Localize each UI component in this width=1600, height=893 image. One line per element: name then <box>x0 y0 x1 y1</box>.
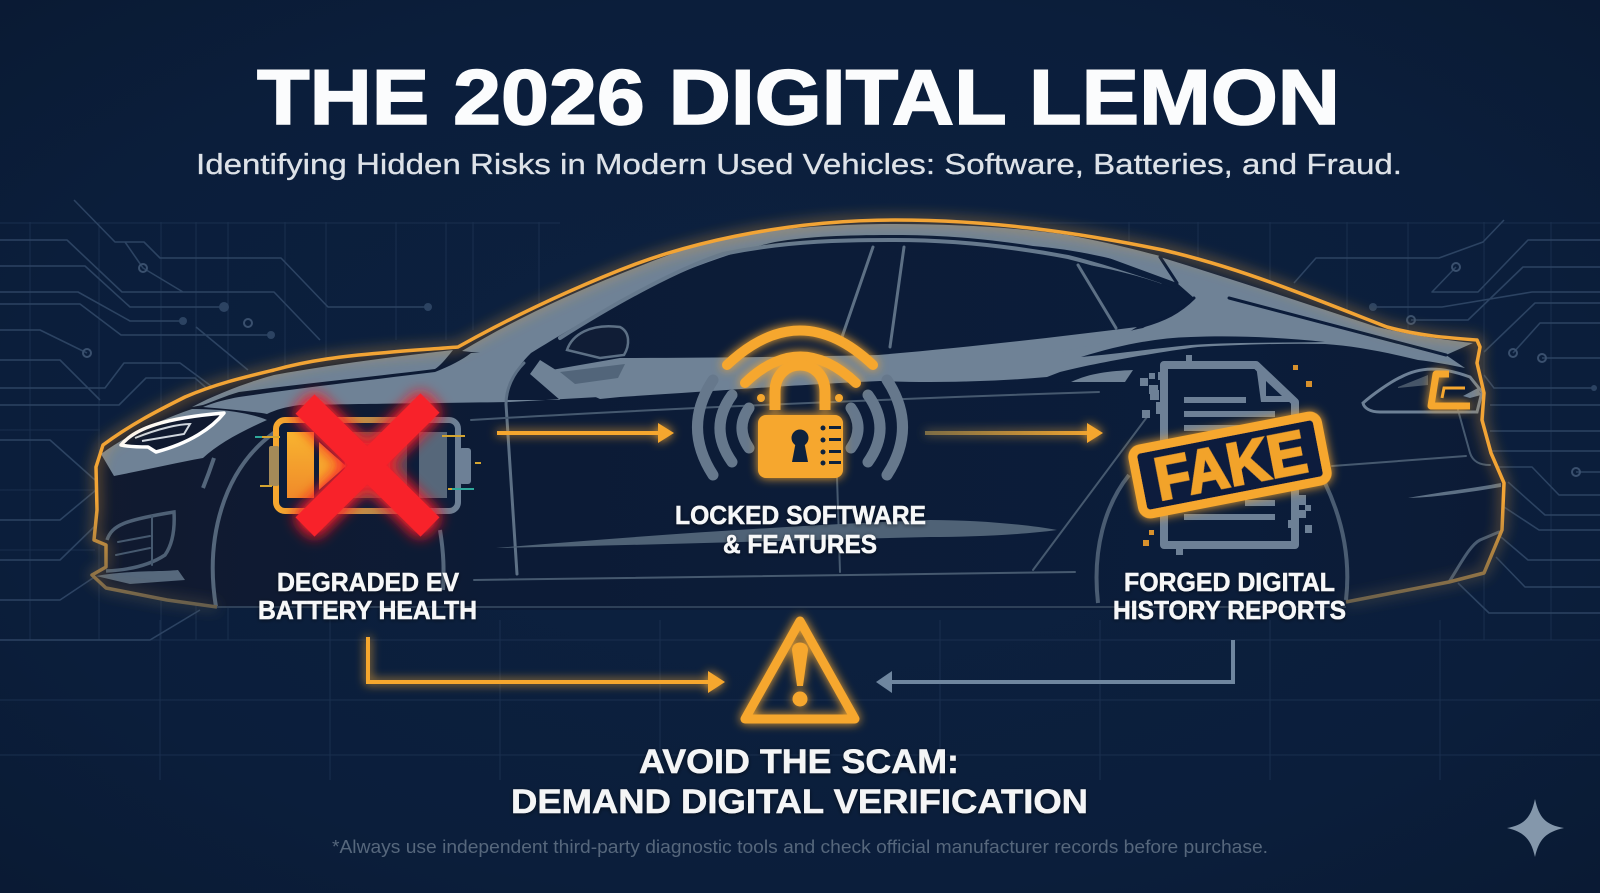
label: degraded battery: BATTERY HEALTH <box>258 595 477 625</box>
headlight <box>121 413 224 452</box>
lower bumper strip <box>96 570 185 584</box>
label: locked software: & FEATURES <box>723 529 877 559</box>
arrow: software to report <box>925 423 1103 443</box>
front wheel arch <box>203 432 444 607</box>
call to action: AVOID THE SCAM: <box>639 743 959 781</box>
side mirror <box>567 326 628 358</box>
rear quarter gray panel <box>1060 240 1473 372</box>
car orange outline <box>92 220 1504 607</box>
label: forged reports: HISTORY REPORTS <box>1113 595 1346 625</box>
battery <box>255 420 481 511</box>
arrow: battery to software <box>497 423 674 443</box>
tail light <box>1363 369 1482 412</box>
title: THE 2026 DIGITAL LEMON <box>257 53 1340 141</box>
rocker lines <box>474 572 1075 580</box>
call to action <box>511 743 1088 821</box>
label: forged reports: FORGED DIGITAL <box>1124 567 1335 597</box>
rear body lines <box>1332 410 1490 466</box>
label: locked software <box>675 500 926 559</box>
mid body crease <box>471 392 1099 420</box>
icon: warning triangle <box>745 621 855 719</box>
footnote: *Always use independent third-party diagnostic tools and check official manufacturer records before purchase. <box>332 837 1268 857</box>
label: forged reports <box>1113 567 1346 625</box>
signal arcs <box>698 380 902 475</box>
hood panel <box>203 353 599 414</box>
rear wheel arch <box>1097 475 1347 603</box>
wifi arcs and padlock <box>727 330 873 478</box>
A-pillar and roof gray band <box>462 224 1160 353</box>
fake stamp: FAKE <box>1149 418 1312 513</box>
door panel lines <box>506 247 1116 574</box>
rear quarter window <box>1077 263 1194 327</box>
arrow: report to warning <box>876 640 1233 693</box>
circuit board background pattern <box>0 200 1600 780</box>
document <box>1140 355 1312 555</box>
arrow: battery to warning <box>368 637 725 693</box>
call to action: DEMAND DIGITAL VERIFICATION <box>511 783 1088 821</box>
icon: locked software <box>698 330 902 478</box>
belt line and shoulder panels <box>540 327 1137 399</box>
label: locked software: LOCKED SOFTWARE <box>675 500 926 530</box>
car body silhouette <box>92 220 1504 610</box>
label: degraded battery: DEGRADED EV <box>277 567 460 597</box>
sill highlight <box>496 520 1057 548</box>
car illustration <box>92 220 1504 610</box>
icon: degraded battery with red cross <box>255 403 481 527</box>
front bumper gray panel <box>101 409 267 476</box>
red X <box>305 403 430 527</box>
fog lamp <box>106 512 174 571</box>
rear panel creases <box>1139 257 1446 355</box>
icon: sparkle <box>1507 799 1564 857</box>
label: degraded battery <box>258 567 477 625</box>
icon: forged document with fake stamp <box>1131 355 1329 555</box>
subtitle: Identifying Hidden Risks in Modern Used Vehicles: Software, Batteries, and Fraud. <box>196 149 1402 181</box>
